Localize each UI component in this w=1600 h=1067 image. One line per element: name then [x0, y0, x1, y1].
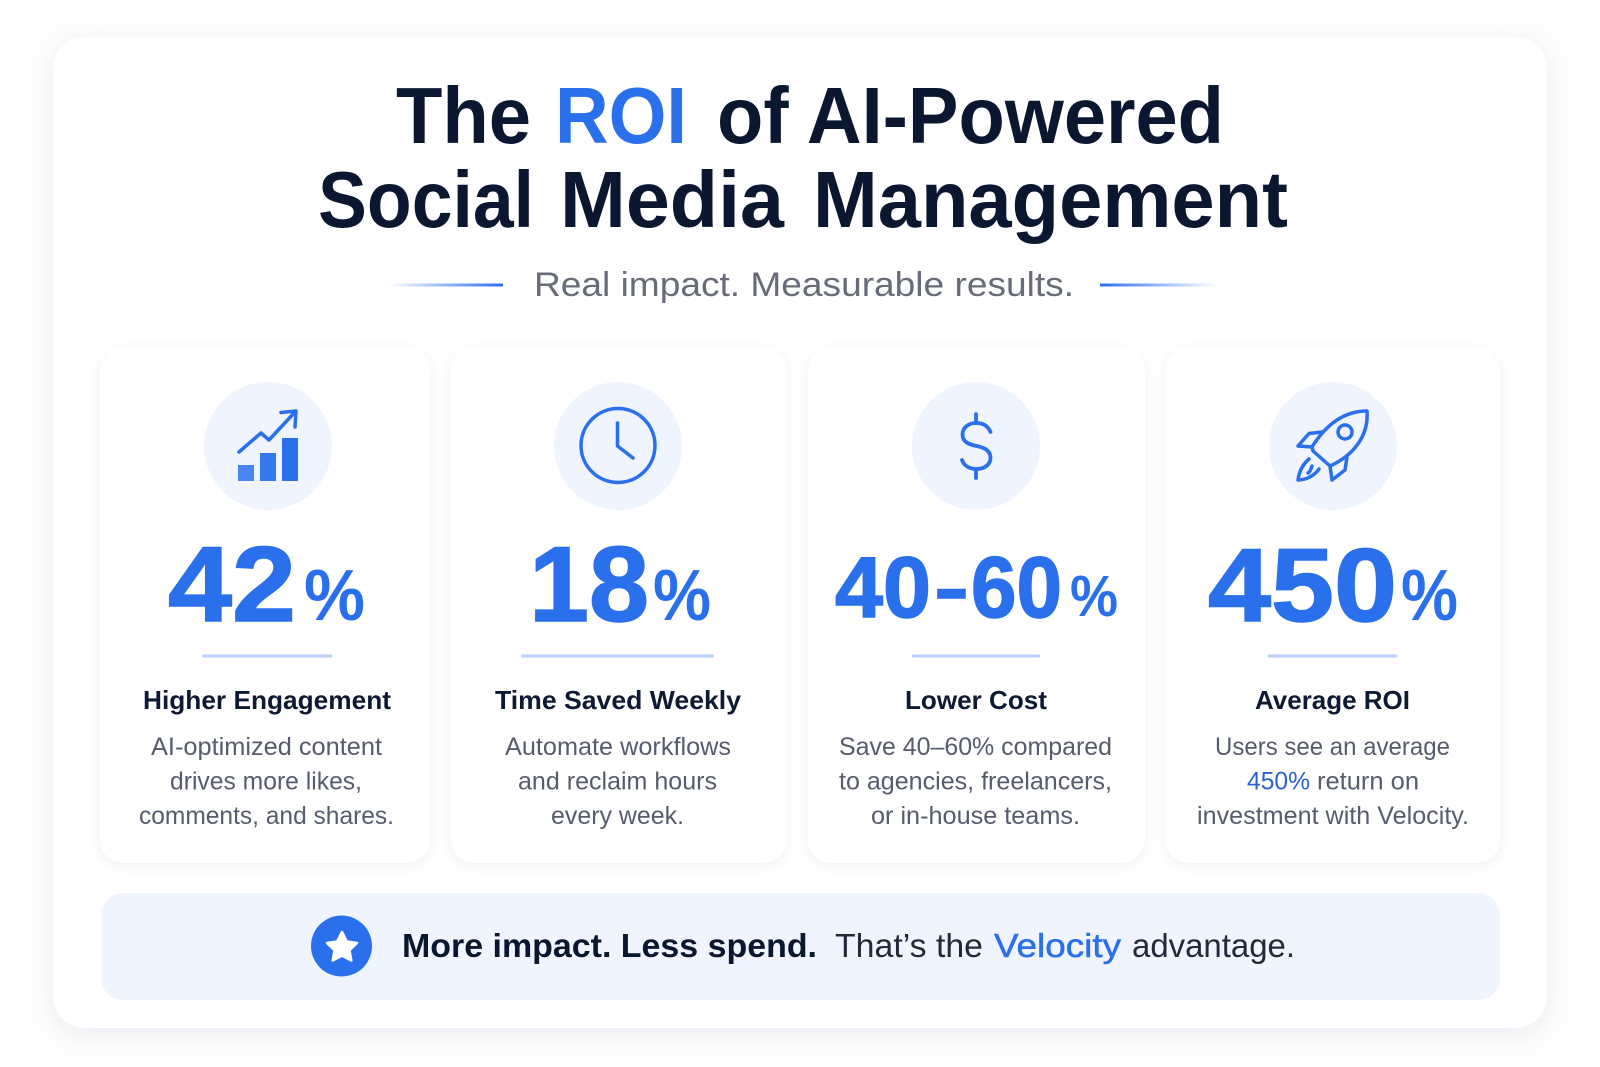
description: Automate workflows	[505, 733, 731, 761]
callout banner	[101, 893, 1500, 1000]
description: investment with Velocity.	[1197, 802, 1469, 830]
description	[1197, 733, 1469, 830]
stat: 450%	[1208, 528, 1458, 644]
stat: 40-60%: –	[936, 540, 967, 636]
stat: 18%: %	[653, 556, 711, 636]
title: Management	[813, 155, 1288, 244]
stat: 42%: %	[304, 556, 365, 636]
icon: clock	[554, 382, 682, 510]
panel: time saved	[451, 347, 787, 863]
description	[139, 733, 394, 830]
icon: dollar sign	[912, 382, 1040, 510]
heading: Average ROI	[1255, 685, 1410, 715]
icon: rocket	[1269, 382, 1397, 510]
description: to agencies, freelancers,	[839, 768, 1112, 796]
icon: star badge	[311, 916, 372, 976]
title: of AI-Powered	[717, 71, 1224, 160]
panel: higher engagement	[100, 347, 430, 863]
stat: 40-60%: 40	[835, 540, 931, 636]
heading: Lower Cost	[905, 685, 1047, 715]
stat: 40-60%	[835, 540, 1118, 636]
description: drives more likes,	[170, 768, 362, 796]
description: or in-house teams.	[871, 802, 1080, 830]
description: every week.	[551, 802, 684, 830]
icon: bar chart with rising arrow	[204, 382, 332, 510]
stat: 18%: 18	[529, 524, 649, 644]
description: AI-optimized content	[151, 733, 382, 761]
stat: 450%: 450	[1208, 528, 1397, 644]
banner text	[402, 927, 1295, 964]
description: Save 40–60% compared	[839, 733, 1112, 761]
banner text: advantage.	[1132, 927, 1295, 964]
description: Users see an average	[1215, 733, 1450, 761]
description	[839, 733, 1112, 830]
title: ROI	[555, 71, 687, 160]
stat: 450%: %	[1401, 556, 1458, 636]
description: and reclaim hours	[518, 768, 717, 796]
title: Social	[318, 155, 534, 244]
description	[505, 733, 731, 830]
description: 450%	[1247, 768, 1310, 796]
stat: 42%: 42	[168, 524, 296, 644]
panel: lower cost	[808, 347, 1145, 863]
subtitle with side rules: Real impact. Measurable results.	[534, 266, 1074, 304]
banner text: Velocity	[994, 927, 1122, 964]
stat: 42%	[168, 524, 365, 644]
stat: 40-60%: 60	[971, 540, 1062, 636]
heading: Higher Engagement	[143, 685, 391, 715]
title	[318, 71, 1288, 244]
heading: Time Saved Weekly	[495, 685, 742, 715]
title: Media	[560, 155, 785, 244]
title: The	[396, 71, 531, 160]
banner text: That’s the	[835, 927, 983, 964]
stat: 18%	[529, 524, 711, 644]
subtitle with side rules	[388, 266, 1216, 304]
description: comments, and shares.	[139, 802, 394, 830]
description: return on	[1317, 768, 1419, 796]
panel: average ROI	[1165, 347, 1500, 863]
banner text: More impact. Less spend.	[402, 927, 817, 964]
stat: 40-60%: %	[1070, 564, 1118, 629]
